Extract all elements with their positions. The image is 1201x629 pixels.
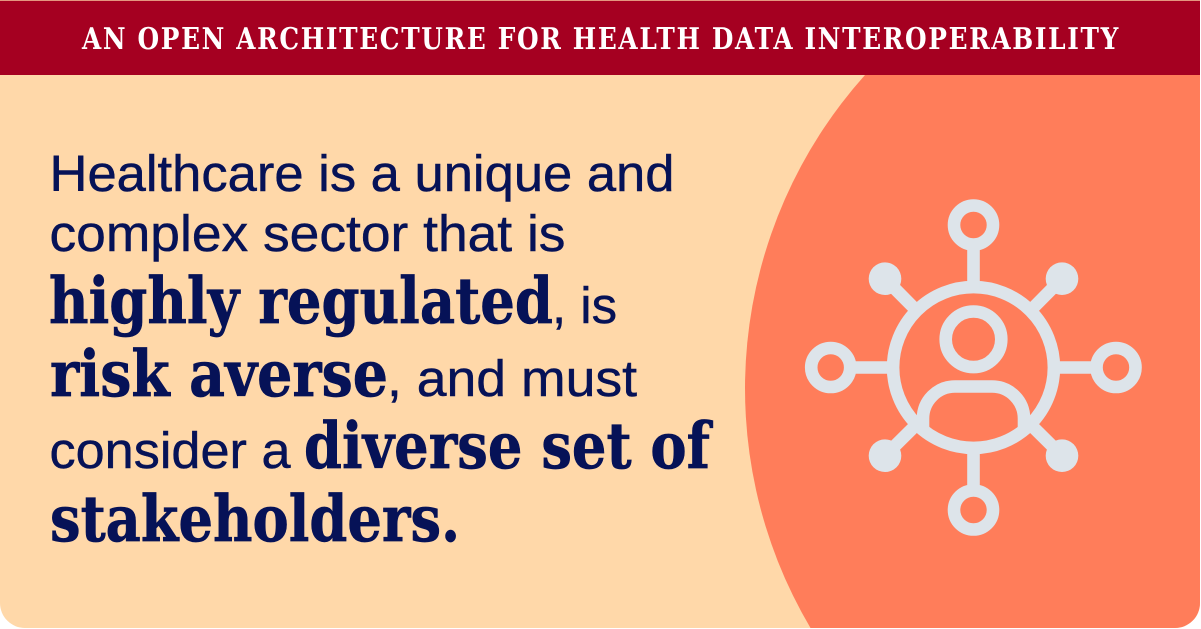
open nodes xyxy=(811,206,1136,530)
orange circle panel xyxy=(745,75,1200,628)
main statement text: complex sector that is xyxy=(50,205,566,262)
central ring xyxy=(893,287,1054,448)
main statement text xyxy=(49,145,713,557)
main statement text: highly regulated xyxy=(49,264,553,339)
person body xyxy=(923,386,1024,431)
filled nodes xyxy=(869,262,1078,472)
header banner xyxy=(0,1,1200,75)
main statement text: consider a xyxy=(50,422,291,479)
main statement text: , is xyxy=(552,277,617,334)
icon: person network xyxy=(811,206,1136,530)
main statement text: , and must xyxy=(387,350,637,407)
network spokes xyxy=(850,245,1097,490)
person head xyxy=(946,312,1001,367)
main statement text: risk averse xyxy=(50,337,388,412)
main statement text: stakeholders. xyxy=(50,482,460,557)
main statement text: diverse set of xyxy=(304,409,713,484)
main statement text: Healthcare is a unique and xyxy=(50,145,674,202)
